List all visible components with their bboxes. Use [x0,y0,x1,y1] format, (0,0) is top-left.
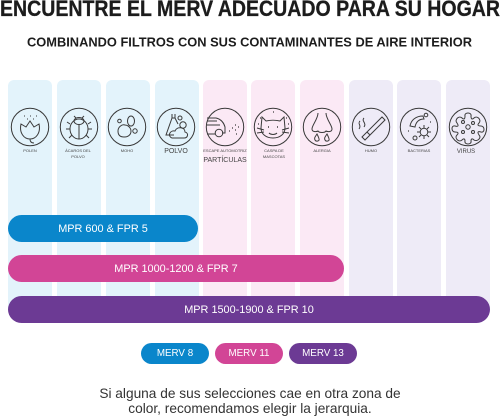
icon: pollen [11,108,49,146]
labels [23,148,475,164]
labels: MASCOTAS [263,154,285,159]
labels: POLVO [164,148,188,155]
icon: bacteria [400,108,438,146]
bar: MERV 8 [8,215,198,242]
subtitle: COMBINANDO FILTROS CON SUS CONTAMINANTES DE AIRE INTERIOR [27,34,473,50]
bar: MERV 8: MPR 600 & FPR 5 [58,223,148,235]
legend: MERV 8 [141,343,209,364]
icon: nose [303,108,341,146]
legend: MERV 13: MERV 13 [302,348,344,359]
legend: MERV 11 [215,343,283,364]
legend: MERV 13 [289,343,357,364]
footer note [99,386,401,416]
footer note: Si alguna de sus selecciones cae en otra zona de [99,386,401,401]
labels: ALERGIA [313,148,331,153]
labels: CASPA DE [264,148,284,153]
icon: dust [157,108,195,146]
icon: virus [449,108,487,146]
legend: MERV 11: MERV 11 [228,348,270,359]
icon: cat [254,108,292,146]
legend: MERV 8: MERV 8 [157,348,193,359]
icon: smoke [352,108,390,146]
labels: ESCAPE AUTOMOTRIZ [203,148,247,153]
bar: MERV 13 [8,296,490,323]
labels: MOHO [121,148,133,153]
bar: MERV 11: MPR 1000-1200 & FPR 7 [114,263,238,275]
icon: mold [108,108,146,146]
labels: POLVO [71,154,85,159]
labels: POLEN [23,148,37,153]
icon: dust mite [60,108,98,146]
panel: column backgrounds [8,80,490,308]
icon: car exhaust [206,108,244,146]
labels: PARTÍCULAS [203,157,247,164]
labels: HUMO [365,148,377,153]
labels: BACTERIAS [408,148,430,153]
labels: VIRUS [457,149,475,155]
footer note: color, recomendamos elegir la jerarquia. [128,401,372,416]
bar: MERV 13: MPR 1500-1900 & FPR 10 [184,304,314,316]
labels: ÁCAROS DEL [65,148,91,153]
bar: MERV 11 [8,255,344,282]
